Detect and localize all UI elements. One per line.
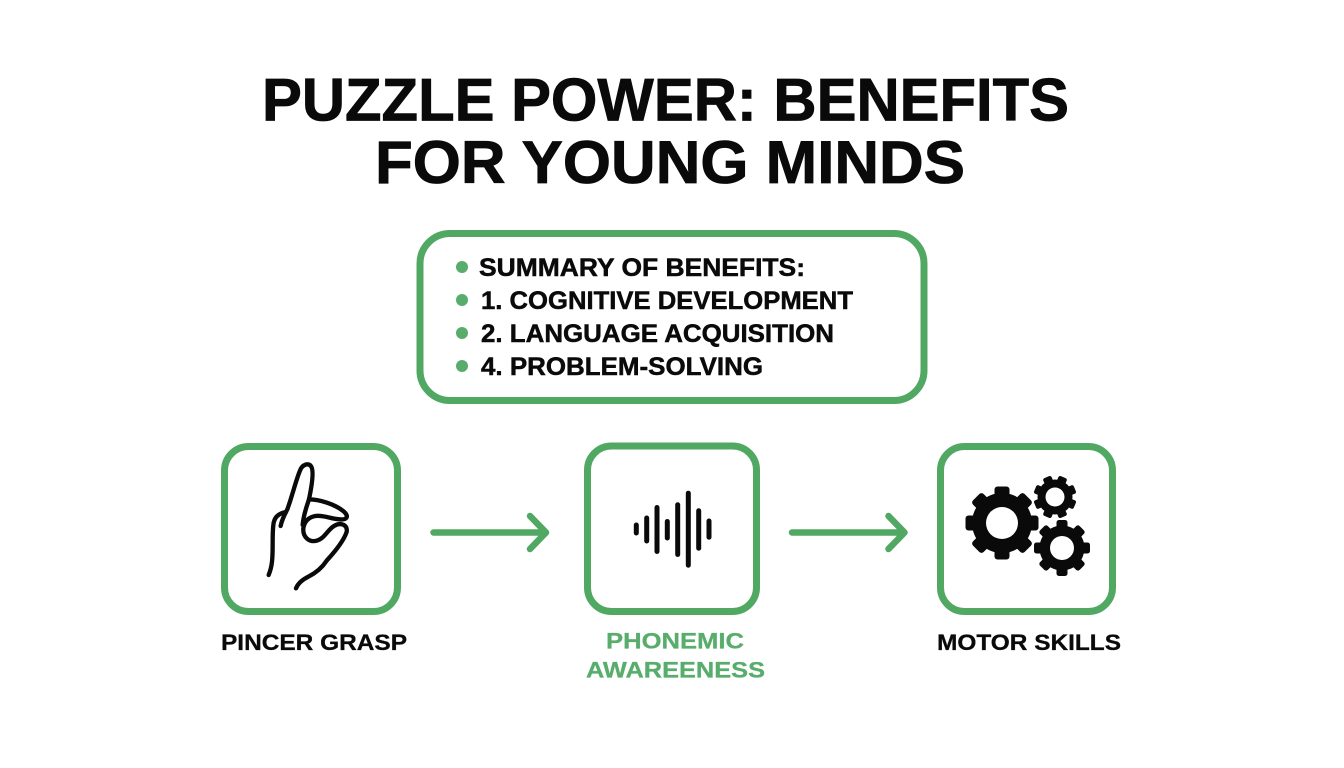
panel: pincer grasp [221,446,407,655]
label: motor skills: MOTOR SKILLS [937,630,1121,655]
arrow: pincer grasp to phonemic awareness [434,516,546,549]
panel: summary of benefits: 1. COGNITIVE DEVELOPMENT [481,287,853,315]
arrow: phonemic awareness to motor skills [792,516,904,549]
panel: motor skills [937,446,1121,655]
icon: gears [966,475,1090,576]
panel: summary of benefits: 4. PROBLEM-SOLVING [481,353,763,381]
label: phonemic awareness [586,628,765,682]
icon: pinching hand [269,464,347,588]
label: phonemic awareness: AWAREENESS [586,658,765,682]
panel: summary of benefits: SUMMARY OF BENEFITS: [479,254,805,282]
title [262,66,1069,196]
title: PUZZLE POWER: BENEFITS [262,66,1069,134]
panel: summary of benefits [420,234,924,400]
label: phonemic awareness: PHONEMIC [606,628,744,654]
title: FOR YOUNG MINDS [375,129,965,196]
icon: sound wave [636,493,709,565]
panel: phonemic awareness [586,446,765,682]
panel: summary of benefits: 2. LANGUAGE ACQUISITION [481,320,834,348]
label: pincer grasp: PINCER GRASP [221,630,407,655]
